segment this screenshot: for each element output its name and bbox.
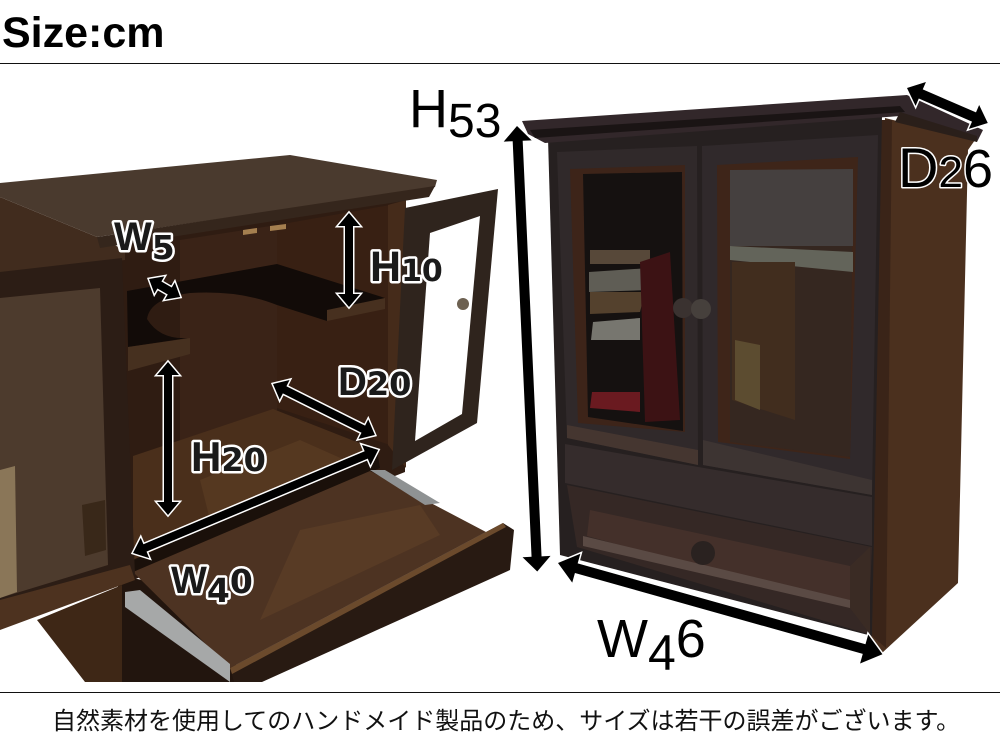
arrow: D26 bbox=[902, 76, 993, 135]
label: W46: 6 bbox=[676, 609, 706, 669]
cabinet top moulding bbox=[522, 95, 983, 143]
arrow: W40 bbox=[129, 440, 382, 563]
drawer knob bbox=[691, 541, 715, 565]
upper shelf with arc cut-out bbox=[127, 264, 385, 347]
arrow: W46 bbox=[554, 549, 886, 669]
cabinet top bbox=[0, 155, 437, 237]
base under the door bbox=[37, 585, 122, 682]
label: D26: D26 bbox=[898, 136, 993, 199]
drawer slide rail bbox=[125, 590, 230, 682]
photo: closed cabinet bbox=[522, 95, 983, 653]
title: Size:cm bbox=[2, 9, 165, 57]
arrow: H53 bbox=[503, 125, 551, 572]
label: W5: 5 bbox=[152, 228, 175, 267]
left open door bbox=[0, 258, 135, 610]
label: W40: W bbox=[171, 560, 207, 602]
label: H53: H bbox=[409, 79, 448, 139]
cabinet side bbox=[870, 118, 975, 653]
label: H10: H10 bbox=[370, 243, 443, 291]
arrow: D20 bbox=[268, 374, 380, 445]
arrow: H10 bbox=[338, 213, 360, 307]
label: W5: W bbox=[114, 215, 152, 259]
label: H53: 53 bbox=[448, 95, 501, 148]
label: W46: W bbox=[597, 609, 648, 669]
dark base behind the rail bbox=[118, 575, 240, 682]
label: W40: 0 bbox=[230, 562, 253, 601]
label: H20: H20 bbox=[191, 433, 266, 480]
front rail bbox=[565, 444, 872, 546]
arrow: H20 bbox=[157, 362, 179, 515]
right open door bbox=[392, 189, 498, 470]
label: D20: D20 bbox=[338, 360, 411, 404]
cabinet floor bbox=[133, 409, 377, 560]
drawer side rail top bbox=[370, 470, 440, 505]
label: W40: 4 bbox=[207, 571, 230, 610]
drawer bbox=[567, 485, 872, 634]
lower left shelf bbox=[128, 338, 190, 371]
arrow: W5 bbox=[144, 270, 185, 306]
drawer front lip bbox=[230, 523, 514, 682]
cabinet front body bbox=[548, 116, 882, 636]
interior back wall bbox=[120, 198, 405, 580]
left glass door bbox=[557, 146, 698, 465]
left side wall bbox=[0, 197, 125, 274]
door knobs bbox=[673, 298, 693, 318]
label: W46: 4 bbox=[648, 625, 676, 681]
pull-out drawer surface bbox=[133, 471, 486, 668]
right glass door bbox=[702, 135, 878, 495]
hinge knobs under the top bbox=[243, 228, 257, 235]
photo: open cabinet interior bbox=[0, 155, 514, 682]
caption: 自然素材を使用してのハンドメイド製品のため、サイズは若干の誤差がございます。 bbox=[52, 707, 960, 735]
